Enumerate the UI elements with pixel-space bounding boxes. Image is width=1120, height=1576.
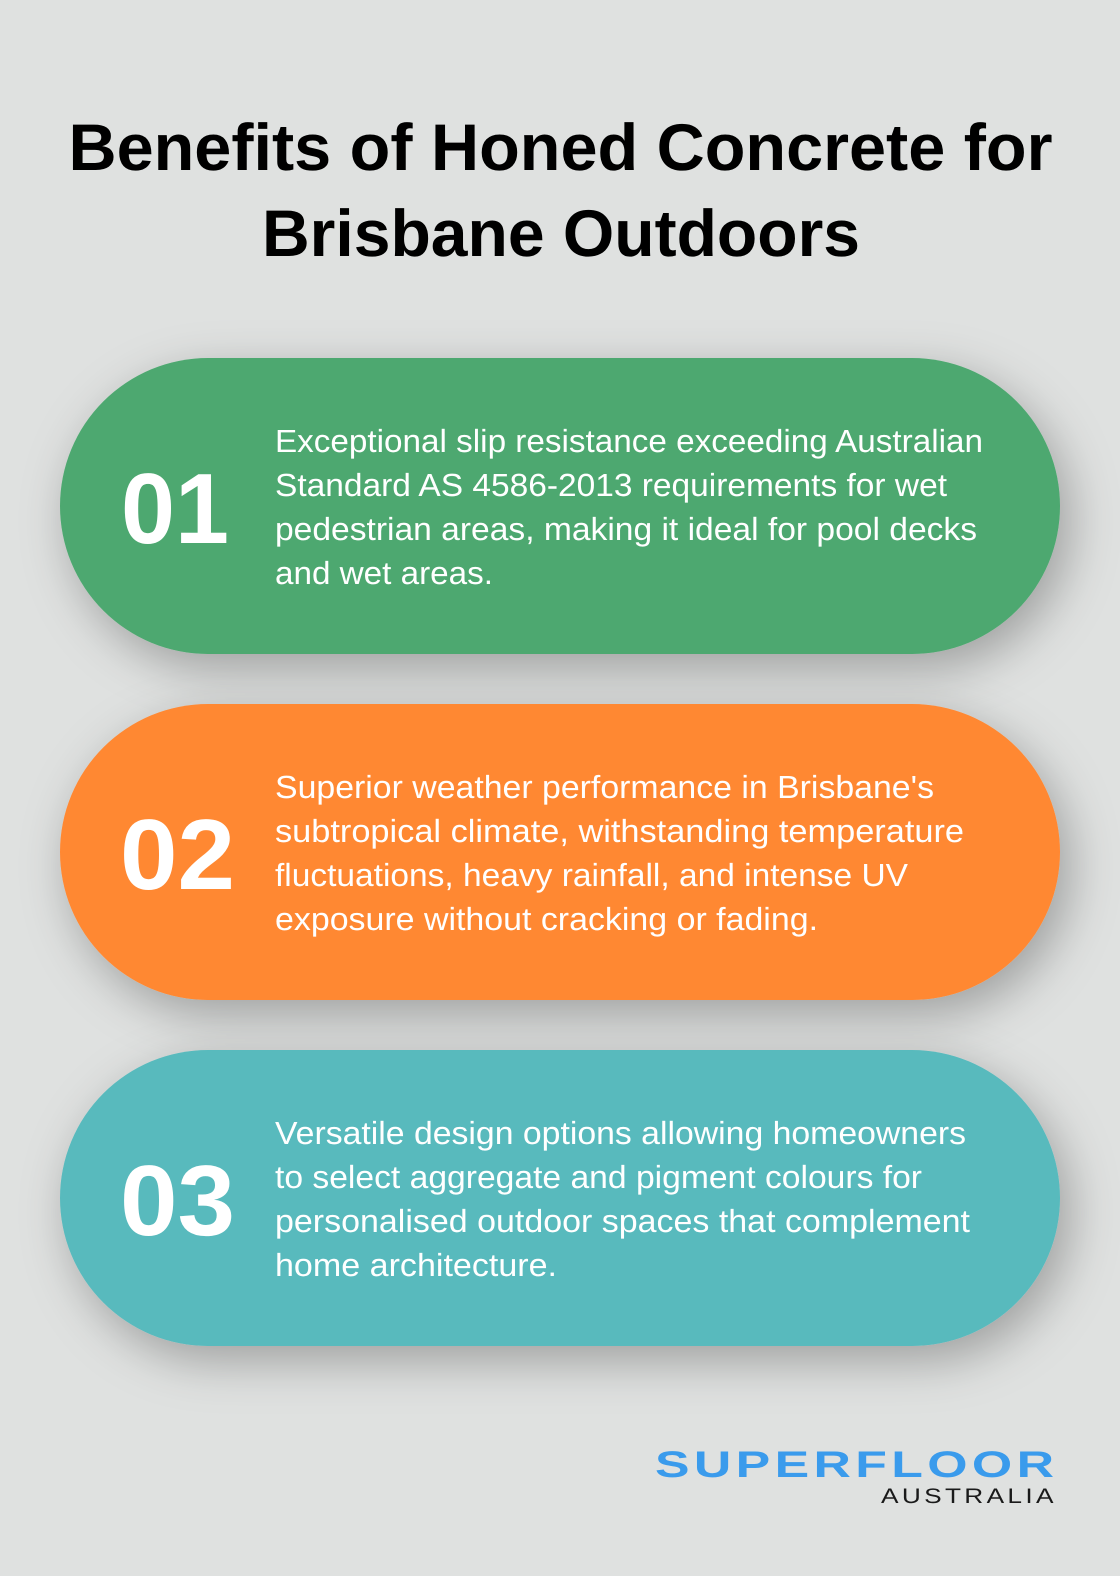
benefit text 01: and wet areas. bbox=[275, 555, 493, 591]
benefit text 02: subtropical climate, withstanding temperature bbox=[275, 813, 964, 849]
panel: benefit 02 weather performance bbox=[60, 704, 1060, 1000]
panel: benefit 01 slip resistance bbox=[60, 358, 1060, 654]
teal pill background bbox=[60, 1050, 1060, 1346]
benefit text 03: Versatile design options allowing homeowners bbox=[275, 1115, 966, 1151]
benefit text 02 bbox=[275, 769, 964, 937]
title bbox=[68, 110, 1052, 270]
logo: Superfloor Australia: SUPERFLOOR bbox=[655, 1444, 1054, 1485]
benefit text 02: exposure without cracking or fading. bbox=[275, 901, 818, 937]
orange pill background bbox=[60, 704, 1060, 1000]
number 01: 01 bbox=[121, 453, 229, 565]
green pill background bbox=[60, 358, 1060, 654]
title: Brisbane Outdoors bbox=[262, 196, 860, 270]
benefit text 01 bbox=[275, 423, 983, 591]
panel: benefit 03 design options bbox=[60, 1050, 1060, 1346]
benefit text 02: Superior weather performance in Brisbane's bbox=[275, 769, 934, 805]
benefit text 03: personalised outdoor spaces that complement bbox=[275, 1203, 970, 1239]
title: Benefits of Honed Concrete for bbox=[68, 110, 1052, 184]
benefit text 03 bbox=[275, 1115, 970, 1283]
logo: Superfloor Australia: AUSTRALIA bbox=[881, 1485, 1054, 1508]
benefit text 03: home architecture. bbox=[275, 1247, 557, 1283]
logo: Superfloor Australia bbox=[655, 1444, 1054, 1508]
benefit text 01: Exceptional slip resistance exceeding Australian bbox=[275, 423, 983, 459]
benefit text 03: to select aggregate and pigment colours for bbox=[275, 1159, 922, 1195]
benefit text 02: fluctuations, heavy rainfall, and intense UV bbox=[275, 857, 909, 893]
benefit text 01: pedestrian areas, making it ideal for pool decks bbox=[275, 511, 977, 547]
number 03: 03 bbox=[120, 1145, 235, 1257]
benefit text 01: Standard AS 4586-2013 requirements for wet bbox=[275, 467, 947, 503]
number 02: 02 bbox=[120, 799, 235, 911]
